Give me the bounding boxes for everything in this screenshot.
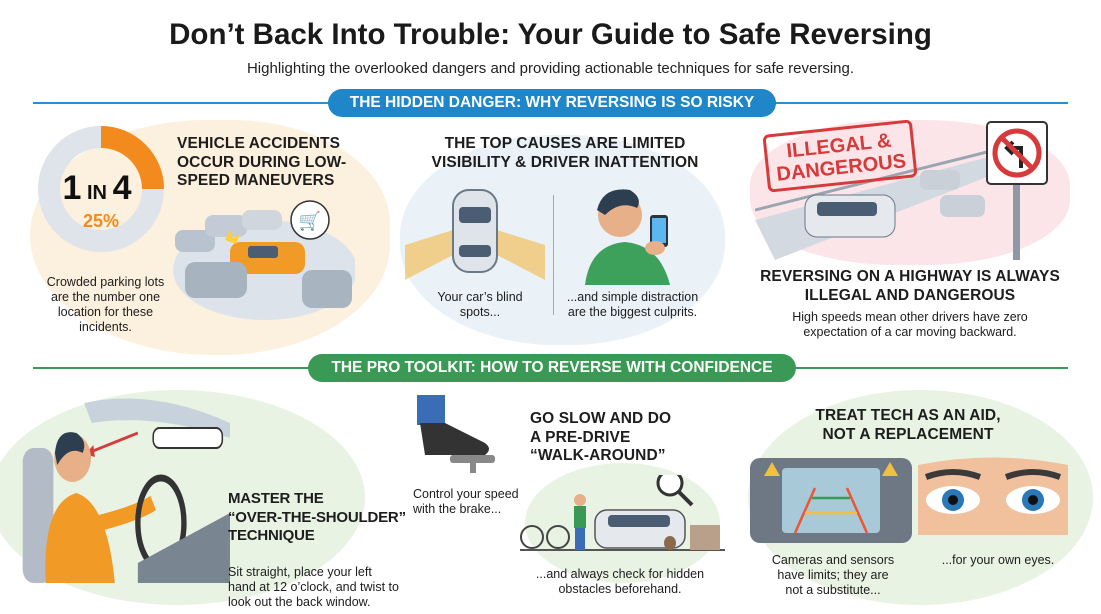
heading: “OVER-THE-SHOULDER” [228, 508, 406, 526]
heading [530, 410, 671, 464]
donut chart: 1 IN 4 [63, 169, 132, 207]
subtitle: Highlighting the overlooked dangers and providing actionable techniques for safe reversing. [247, 60, 854, 77]
background blob [30, 120, 390, 355]
icon: backup camera screen [750, 458, 912, 543]
heading: NOT A REPLACEMENT [822, 426, 994, 442]
background blob [748, 390, 1093, 605]
heading: THE TOP CAUSES ARE LIMITED VISIBILITY & DRIVER INATTENTION [432, 135, 698, 170]
panel: go slow [413, 395, 725, 596]
illustration: driver [22, 398, 230, 583]
illustration: parking lot cars: 🛒 [299, 210, 321, 231]
section header: hidden danger: THE HIDDEN DANGER: WHY REVERSING IS SO RISKY [350, 94, 754, 111]
divider [553, 195, 554, 315]
caption: ...and always check for hidden obstacles beforehand. [536, 567, 704, 596]
heading: REVERSING ON A HIGHWAY IS ALWAYS ILLEGAL AND DANGEROUS [760, 268, 1060, 304]
panel: top causes: ...and simple distraction are the biggest culprits. [567, 290, 698, 319]
caption: Sit straight, place your left hand at 12 o’clock, and twist to look out the back window. [228, 565, 399, 609]
illustration: blind spots car [405, 189, 545, 280]
caption: Control your speed with the brake... [413, 487, 519, 516]
illustration: distracted driver [585, 189, 670, 285]
heading [815, 407, 1001, 442]
illustration: walk-around [520, 475, 725, 551]
background blob [400, 135, 725, 345]
illustration: parking lot cars [173, 200, 355, 320]
icon: no-reverse sign [986, 121, 1048, 260]
background blob [750, 120, 1070, 265]
section header: pro toolkit [308, 354, 796, 382]
background blob [525, 463, 720, 583]
section divider green [33, 367, 1068, 369]
heading: TECHNIQUE [228, 527, 315, 544]
caption: High speeds mean other drivers have zero expectation of a car moving backward. [792, 310, 1028, 339]
section divider blue [33, 102, 1068, 104]
panel: tech as aid [748, 390, 1093, 605]
donut chart: 25% [83, 211, 119, 231]
title: Don’t Back Into Trouble: Your Guide to Safe Reversing [169, 18, 932, 51]
panel: top causes [400, 135, 725, 345]
panel: low-speed accidents [30, 120, 390, 355]
panel: over-the-shoulder [0, 390, 406, 609]
captions: Cameras and sensors have limits; they are not a substitute... [772, 553, 894, 597]
section header: pro toolkit: THE PRO TOOLKIT: HOW TO REVERSE WITH CONFIDENCE [331, 359, 773, 376]
illustration: highway [755, 150, 986, 260]
heading: “WALK-AROUND” [530, 447, 666, 464]
heading: MASTER THE [228, 490, 324, 507]
heading: A PRE-DRIVE [530, 428, 630, 446]
heading: GO SLOW AND DO [530, 410, 671, 427]
icon: eyes [918, 458, 1068, 535]
panel: highway [750, 120, 1070, 339]
stamp [762, 119, 918, 193]
heading [228, 490, 406, 544]
panel: tech as aid: ...for your own eyes. [942, 553, 1054, 567]
donut chart [38, 126, 164, 252]
stamp: ILLEGAL & [785, 130, 892, 162]
heading: VEHICLE ACCIDENTS OCCUR DURING LOW-SPEED MANEUVERS [177, 135, 346, 189]
heading: TREAT TECH AS AN AID, [815, 407, 1001, 424]
stamp: DANGEROUS [775, 150, 907, 186]
icon: foot on brake [417, 395, 495, 473]
captions: Your car’s blind spots... [437, 290, 523, 319]
section header: hidden danger [328, 89, 776, 117]
caption: Crowded parking lots are the number one location for these incidents. [47, 275, 164, 334]
background blob [0, 390, 365, 605]
